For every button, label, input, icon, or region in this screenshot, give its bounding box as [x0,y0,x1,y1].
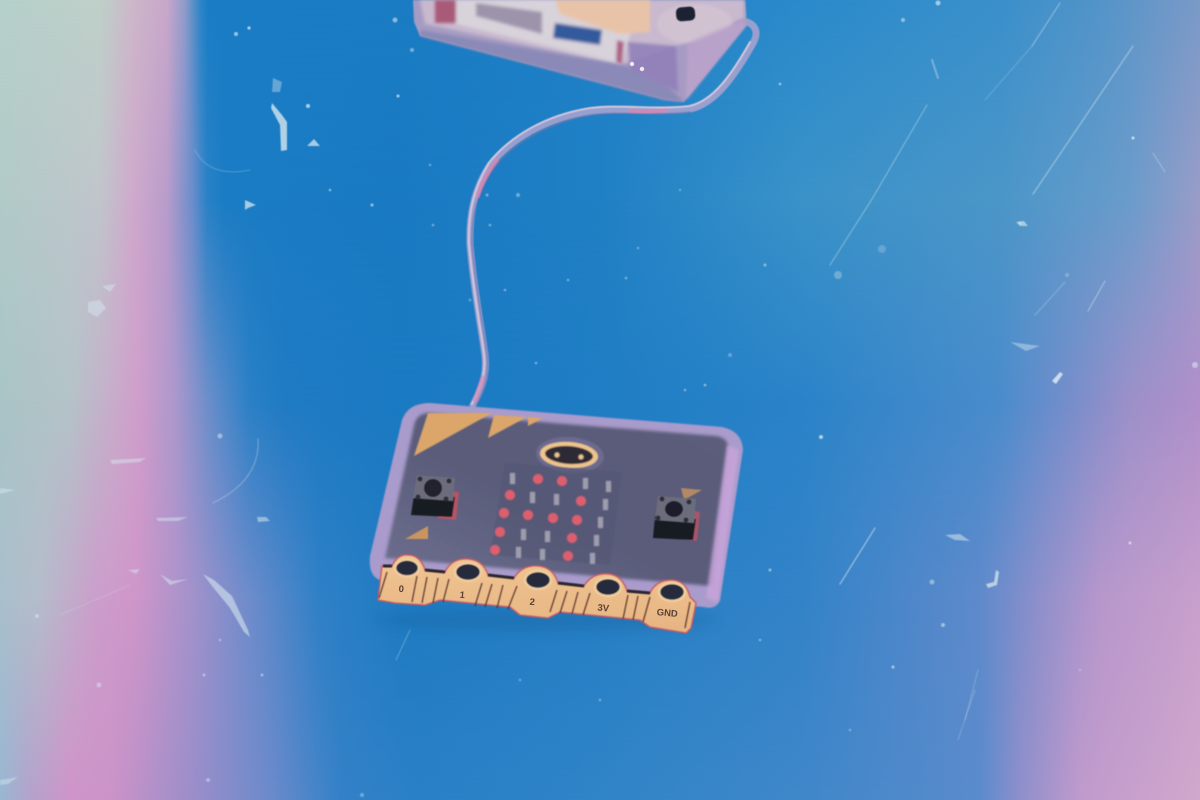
wire from battery box to board [469,22,756,405]
battery box: end face [686,20,746,100]
battery box: pale sparkle area [657,4,733,44]
board: orange triangles [414,413,543,456]
board: pin labels [398,584,678,620]
board: microphone oval [535,435,605,475]
battery box: purple window [628,42,678,92]
board: pin labels: 2 [529,597,535,608]
battery box: switch [676,6,696,22]
board: pin labels: 1 [459,590,466,601]
battery box: front strip [420,30,684,102]
battery box [413,0,747,102]
board: right case edge highlight [706,445,739,602]
board: pin labels: 0 [398,584,404,595]
board: small B marker [681,488,702,500]
board: pin holes [395,560,685,601]
board shadow [375,609,715,631]
battery box top face [420,0,744,65]
battery box: battery with label [435,0,650,64]
board: edge connector [378,555,696,633]
board: pin labels: 3V [597,603,610,615]
board: pin labels: GND [656,607,678,620]
board: button B [653,496,700,541]
board: connector dark top edge [383,566,650,593]
micro:bit board [370,403,743,633]
board: translucent case [370,403,743,608]
board: connector teeth [379,572,690,628]
board: button A [411,475,459,520]
board: dark face [385,413,728,586]
board: small A marker [405,526,428,539]
board: LED matrix [490,463,622,565]
